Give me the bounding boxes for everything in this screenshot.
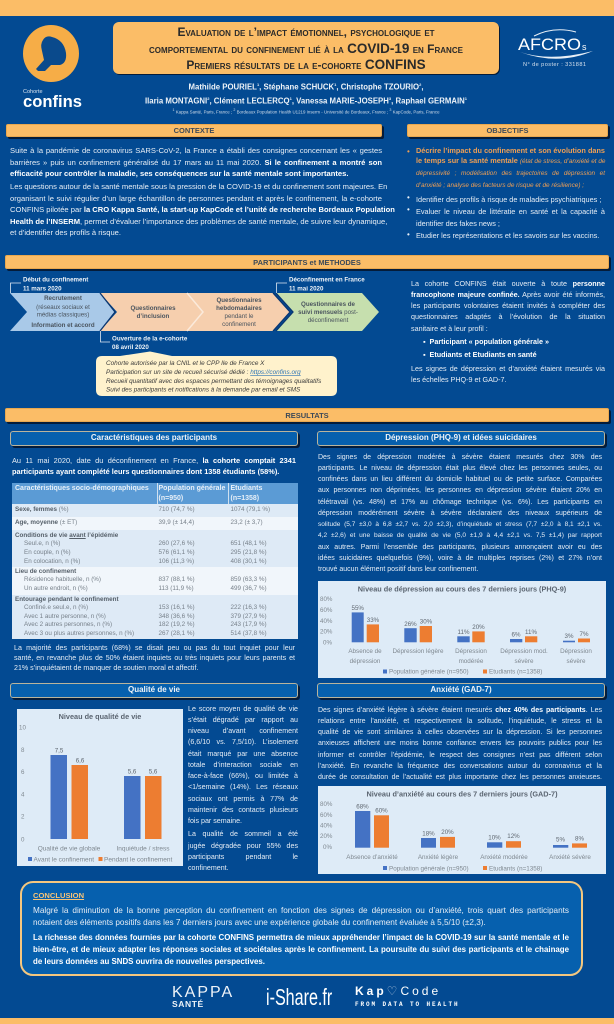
chart: niveau de qualité de vie: 4 xyxy=(21,792,25,798)
list: objectifs: dépressivité ; modélisation des trajectoires de dépression et xyxy=(416,170,605,177)
chevron: recrutement: médias classiques) xyxy=(37,312,89,318)
chart: niveau d'anxiété GAD-7: 60% xyxy=(320,812,333,819)
text: dépression: dépression modérément sévère à sévère déclaraient des niveaux supérieurs de xyxy=(318,510,602,517)
text: qualité de vie: totale d’interaction sociale en xyxy=(188,761,298,769)
timeline markers: 11 mars 2020 xyxy=(23,286,62,292)
text: inquiétudes: La majorité des participants (68%) se disait peu ou pas du tout inquiet pour leur xyxy=(14,644,295,652)
table header: Caractéristiques socio-démographiques xyxy=(15,485,149,492)
text: qualité de vie: Le score moyen de qualité de vie xyxy=(188,704,298,712)
chevron: recrutement xyxy=(10,293,115,331)
table rows: Entourage pendant le confinement xyxy=(15,596,119,603)
text: dépression: télétravail (vs. 48%) et 17% au chômage technique (vs. 6%). Les participants en xyxy=(318,498,602,506)
axis labels and legend: sévère xyxy=(515,658,534,665)
text: cohorte: participants ayant complété leurs questionnaires dont 1358 étudiants (58%). xyxy=(12,467,279,476)
heading: participants et methodes xyxy=(5,255,609,269)
heading: caractéristiques des participants: Caractéristiques des participants xyxy=(91,433,217,442)
text: anxiété: anxieuses affichent une moins bonne confiance envers les pouvoirs publics pour les xyxy=(318,740,602,747)
chart: niveau de dépression PHQ-9: 40% xyxy=(320,618,333,625)
text: population de l'étude: sanitaire et à leur profil : xyxy=(411,324,488,333)
heading: anxiété: Anxiété (GAD-7) xyxy=(430,685,492,694)
chart: niveau de qualité de vie: 8 xyxy=(21,747,25,754)
table rows: 23,2 (± 3,7) xyxy=(230,519,263,526)
table rows: 295 (21,8 %) xyxy=(230,549,267,556)
table rows: 379 (27,9 %) xyxy=(230,612,267,620)
table header: (n=950) xyxy=(158,495,183,502)
bars: 7,5 xyxy=(55,748,64,754)
text: population de l'étude xyxy=(411,278,605,384)
table rows: Lieu de confinement xyxy=(15,568,76,575)
bars: 5,6 xyxy=(128,768,137,776)
text: qualité de vie: niveau d’avant confinement xyxy=(188,727,298,735)
text: conclusion: La richesse des données fournies par la cohorte CONFINS permettra de mieux appréhender l’impact de la COVID-19 sur la santé mentale et le xyxy=(33,933,569,942)
text: population de l'étude: francophone majeure confinée. Après avoir été informés, xyxy=(411,290,605,299)
text: contexte: Les questions autour de la santé mentale sous la pression de la COVID-19 et du confinement sont majeures. En xyxy=(10,182,387,191)
text: conclusion: Malgré la diminution de la bonne perception du confinement en fonction des signes de dépression ou d’anxiété, trois quart des participants xyxy=(33,906,569,914)
table rows: 576 (61,1 %) xyxy=(158,549,195,556)
chevron: questionnaires: d’inclusion xyxy=(137,313,170,320)
table rows: 651 (48,1 %) xyxy=(230,540,267,547)
chart: niveau de dépression PHQ-9: 0% xyxy=(323,640,332,646)
bullets: • xyxy=(407,230,410,238)
bars xyxy=(355,804,587,848)
table rows: 348 (36,6 %) xyxy=(158,612,195,620)
chart: niveau d'anxiété GAD-7 xyxy=(318,786,606,874)
bars: 60% xyxy=(375,808,388,814)
bullets: • xyxy=(407,192,410,202)
table rows: 113 (11,9 %) xyxy=(158,585,194,592)
bars: 55% xyxy=(352,605,364,612)
heading: resultats: RESULTATS xyxy=(285,411,329,420)
bullets: • xyxy=(407,204,410,214)
chevron: recrutement: Recrutement xyxy=(44,295,82,302)
logo: AFCROs: AFCRO xyxy=(518,35,581,54)
logo: Kappa Santé: KAPPA xyxy=(172,984,234,1001)
text: conclusion xyxy=(33,906,569,966)
heading: qualité de vie xyxy=(10,683,298,698)
text: dépression: idées suicidaires quelquefois (9%), voire à de multiples reprises (2%) et 27% n’ont xyxy=(318,555,602,562)
text: dépression: solitude (5,7 ±3,0 à 6,8 ±2,7 vs. 2,0 ±2,3), d’inquiétude et stress (7,7 ±2,0 à 8,1 ±2,1 vs. xyxy=(318,521,602,528)
text: anxiété: informer et contrôler l’épidémie, le respect des consignes n’est pas différent selon xyxy=(318,752,602,759)
bars: 6% xyxy=(512,632,521,638)
axis labels and legend: Etudiants (n=1358) xyxy=(489,668,542,676)
axis labels and legend: Qualité de vie globale xyxy=(38,846,101,852)
text: contexte xyxy=(10,146,395,237)
bars: 12% xyxy=(507,833,520,840)
axis labels and legend: Pendant le confinement xyxy=(104,856,172,864)
chevron: suivi: suivi mensuels post- xyxy=(298,309,358,316)
table header: (n=1358) xyxy=(230,495,259,502)
timeline markers: 11 mai 2020 xyxy=(289,286,324,292)
table rows: Confiné.e seul.e, n (%) xyxy=(24,604,88,611)
chart: niveau de dépression PHQ-9: 80% xyxy=(320,596,333,603)
bars xyxy=(50,748,162,839)
chevron: suivi xyxy=(276,293,379,331)
text: anxiété: durée de consultation de l’actualité est plus importante chez les personnes anxieuses. xyxy=(318,774,602,781)
chart: niveau de qualité de vie xyxy=(17,709,183,866)
text: qualité de vie xyxy=(188,704,298,872)
table rows: Seul.e, n (%) xyxy=(24,540,60,547)
chart: niveau de qualité de vie: Niveau de qualité de vie xyxy=(59,712,141,721)
table rows: 260 (27,6 %) xyxy=(158,540,195,547)
text: inquiétudes: santé, en revanche plus de 50% étaient inquiets ou très inquiets pour leurs parents et xyxy=(14,654,295,662)
bars: 5% xyxy=(556,836,565,844)
logo: Kappa Santé xyxy=(172,984,234,1009)
table header: Etudiants xyxy=(230,485,262,492)
callout: protocole: Cohorte autorisée par la CNIL et le CPP Ile de France X xyxy=(106,360,265,367)
axis labels and legend: Anxiété modérée xyxy=(480,854,528,861)
list: objectifs: identifier des fakes news ; xyxy=(416,219,500,228)
chart: niveau de dépression PHQ-9: 20% xyxy=(320,628,333,636)
axis labels and legend: sévère xyxy=(567,658,586,665)
text: dépression: aux autres. Parmi l’ensemble des participants, plusieurs annonçaient avoir eu des xyxy=(318,544,602,550)
list: objectifs: le temps sur la santé mentale (état de stress, d’anxiété et de xyxy=(416,156,605,165)
text: anxiété: relations entre l’anxiété, et respectivement la solitude, l’inquiétude, le stress et la xyxy=(318,718,602,725)
logo: KapCode: Kap♡Code xyxy=(355,984,441,998)
chart: niveau de dépression PHQ-9 xyxy=(318,581,606,678)
list: objectifs: Identifier des profils à risque de maladies psychiatriques ; xyxy=(416,195,601,204)
callout: protocole: Suivi des participants et notifications à la demande par email et SMS xyxy=(106,386,301,394)
text: dépression: participants. Le niveau de dépression était plus élevé chez les personnes seules, ou xyxy=(318,465,602,472)
text: qualité de vie: sociaux ont permis à 77% de xyxy=(188,794,298,802)
text: cohorte xyxy=(12,456,296,476)
text: qualité de vie: La qualité de sommeil a été xyxy=(188,830,298,838)
chevron: questionnaires: pendant le xyxy=(225,313,254,320)
text: dépression xyxy=(318,454,602,573)
heading: contexte: CONTEXTE xyxy=(174,126,214,135)
table rows: 222 (16,3 %) xyxy=(230,604,267,611)
text: contexte: Health de l’INSERM, permet d’évaluer l’importance des problèmes de santé mentale, de suivre leur dynamique, xyxy=(10,217,387,226)
axis labels and legend: Dépression xyxy=(455,648,487,655)
text: anxiété: qualité de vie sont similaires à celles observées sur la dépression. Si les personnes xyxy=(318,729,602,736)
affiliations: 1 Kappa Santé, Paris, France ; 2 Bordeaux Population Health U1219 Inserm - Université de Bordeaux, France ; 3 KapCode, Paris, France xyxy=(172,108,440,114)
axis labels and legend: Population générale (n=950) xyxy=(389,668,469,676)
heading: participants et methodes: PARTICIPANTS et METHODES xyxy=(253,258,361,267)
bars: 3% xyxy=(565,633,574,640)
text: cohorte: Au 11 mai 2020, date du déconfinement en France, la cohorte comptait 2341 xyxy=(12,456,296,464)
list: objectifs: Décrire l’impact du confinement et son évolution dans xyxy=(416,146,605,154)
list: objectifs: d’anxiété ; analyse des facteurs de risque et de résilience) ; xyxy=(416,182,584,189)
callout: protocole: Participation sur un site de recueil sécurisé dédié : https://confins.org xyxy=(106,369,301,376)
text: population de l'étude: ▪ Participant « population générale » xyxy=(423,337,549,346)
table rows: Avec 1 autre personne, n (%) xyxy=(24,612,106,620)
bars: 20% xyxy=(441,829,454,836)
text: contexte: Suite à la pandémie de coronavirus SARS-CoV-2, la France a établi des consignes concernant les « gestes xyxy=(10,146,382,155)
table rows: 39,9 (± 14,4) xyxy=(158,519,194,526)
text: qualité de vie: <1/semaine (14%). Les réseaux xyxy=(188,783,298,791)
table rows: 106 (11,3 %) xyxy=(158,558,194,564)
chevron: suivi: Questionnaires de xyxy=(301,301,356,308)
text: dépression: Des signes de dépression modérée à sévère étaient mesurés chez 30% des xyxy=(318,454,602,460)
table rows: 153 (16,1 %) xyxy=(158,604,195,611)
text: qualité de vie: maintenir des contacts plusieurs xyxy=(188,806,298,814)
chart: niveau d'anxiété GAD-7: Niveau d’anxiété au cours des 7 derniers jours (GAD-7) xyxy=(366,790,558,798)
table rows: En colocation, n (%) xyxy=(24,558,80,564)
table rows: Sexe, femmes (%) xyxy=(15,506,69,513)
heading: qualité de vie: Qualité de vie xyxy=(128,685,180,694)
table rows: Age, moyenne (± ET) xyxy=(15,519,77,526)
heading: dépression xyxy=(317,431,605,446)
logo: i-Share.fr: i-Share.fr xyxy=(266,984,332,1010)
logo: cohorte confins xyxy=(23,25,82,110)
table rows: En couple, n (%) xyxy=(24,549,71,556)
table rows: Résidence habituelle, n (%) xyxy=(24,576,101,583)
bars: 30% xyxy=(420,618,433,626)
bars: 10% xyxy=(488,834,501,842)
heading: anxiété xyxy=(317,683,605,698)
text: qualité de vie: jugée dégradée pour 55% des xyxy=(188,842,298,850)
text: qualité de vie: fois par semaine. xyxy=(188,817,242,825)
list: objectifs xyxy=(407,146,606,240)
table rows: 267 (28,1 %) xyxy=(158,630,195,637)
text: inquiétudes xyxy=(14,644,295,672)
bars: 11% xyxy=(525,629,537,636)
flow diagram: timeline chevrons xyxy=(10,276,379,350)
table rows: 859 (63,3 %) xyxy=(230,576,267,583)
text: conclusion: bien-être, et de mieux adapter les réponses sociales et sociétales après le confinement. La poursuite du suivi des participants et le chainage xyxy=(33,945,569,954)
axis labels and legend: modérée xyxy=(459,658,484,665)
bars: 20% xyxy=(472,624,485,631)
text: population de l'étude: les participants volontaires étaient invités à compléter des xyxy=(411,301,605,310)
chevron: recrutement: (réseaux sociaux et xyxy=(36,304,90,311)
heading: contexte xyxy=(6,124,382,137)
text: population de l'étude: questionnaires adaptés à l’évolution de la situation xyxy=(411,312,605,321)
text: qualité de vie: était marqué par une absence xyxy=(188,750,298,758)
axis labels and legend: Dépression xyxy=(560,648,592,655)
heading: resultats xyxy=(5,408,609,422)
table header: Population générale xyxy=(158,485,225,492)
heading: conclusion: CONCLUSION xyxy=(33,891,84,900)
bars: 11% xyxy=(458,629,470,636)
text: contexte: barrières » puis un confinement généralisé du 17 mars au 11 mai 2020. Si le confinement a montré son xyxy=(10,158,382,167)
text: contexte: CONFINS pilotée par la CRO Kappa Santé, la start-up KapCode et l’unité de recherche Bordeaux Population xyxy=(10,205,395,214)
timeline markers: Début du confinement xyxy=(23,276,88,284)
authors: Ilaria MONTAGNI2, Clément LECLERCQ1, Vanessa MARIE-JOSEPH3, Raphael GERMAIN1 xyxy=(145,96,467,106)
chart: niveau d'anxiété GAD-7: 40% xyxy=(320,823,333,830)
bars: 26% xyxy=(404,621,417,628)
axis labels and legend: Anxiété légère xyxy=(418,854,459,861)
timeline markers: Ouverture de la e-cohorte xyxy=(112,336,188,342)
axis labels and legend: Inquiétude / stress xyxy=(116,846,170,852)
text: qualité de vie: s’était dégradé par rapport au xyxy=(188,716,298,724)
bars: 7% xyxy=(580,631,589,638)
text: anxiété: l’anxiété. En revanche la fréquence des conversations autour du coronavirus et la xyxy=(318,763,602,770)
text: anxiété: Des signes d’anxiété légère à sévère étaient mesurés chez 40% des participants. Les xyxy=(318,706,602,714)
axis labels and legend xyxy=(348,648,592,676)
logo: Kappa Santé: SANTÉ xyxy=(172,999,204,1009)
table rows: 1074 (79,1 %) xyxy=(230,506,270,513)
heading: caractéristiques des participants xyxy=(10,431,298,446)
text: dépression: confinées dans un lieu différent du domicile habituel ou de petite surface. Comparées xyxy=(318,476,602,483)
text: conclusion: de leurs données au SNDS ouvrira de nouvelles perspectives. xyxy=(33,957,265,966)
chart: niveau d'anxiété GAD-7: 20% xyxy=(320,833,333,840)
text: qualité de vie: confinement. xyxy=(188,864,229,872)
axis labels and legend xyxy=(28,846,172,864)
text: inquiétudes: 21% s’inquiétaient de manquer de soutien moral et affectif. xyxy=(14,664,198,672)
table rows xyxy=(15,506,270,637)
chart: niveau de qualité de vie: 2 xyxy=(21,814,25,820)
axis labels and legend: Dépression mod. xyxy=(500,648,548,655)
top band xyxy=(0,0,614,16)
title: Evaluation de l’impact émotionnel, psychologique et xyxy=(177,25,435,39)
chart: niveau de dépression PHQ-9: Niveau de dépression au cours des 7 derniers jours (PHQ-9) xyxy=(358,584,567,594)
bullets xyxy=(407,146,410,238)
axis labels and legend: Absence d’anxiété xyxy=(346,854,398,861)
logo: KapCode xyxy=(355,984,460,1008)
chart: niveau d'anxiété GAD-7: 80% xyxy=(320,801,333,808)
chevron: questionnaires xyxy=(100,293,290,331)
text: qualité de vie: participants pendant le xyxy=(188,853,298,861)
text: qualité de vie: face-à-face (66%), ou limitée à xyxy=(188,772,298,780)
text: population de l'étude: Les signes de dépression et d’anxiété étaient mesurés via xyxy=(411,364,605,373)
axis labels and legend: Etudiants (n=1358) xyxy=(489,866,542,872)
bottom band xyxy=(0,1018,614,1024)
authors: Mathilde POURIEL1, Stéphane SCHUCK1, Christophe TZOURIO2, xyxy=(188,82,424,92)
table rows: 837 (88,1 %) xyxy=(158,576,195,583)
text: conclusion: notaient des éléments positifs dans les 7 derniers jours avec une expérience globale du confinement évaluée à 5,5/10 (±2,3). xyxy=(33,918,486,926)
chevron: questionnaires: hebdomadaires xyxy=(216,305,262,312)
axis labels and legend: Absence de xyxy=(348,648,382,655)
chevron: questionnaires: Questionnaires xyxy=(216,297,262,304)
text: dépression: trouvé aucun élément positif dans leur confinement. xyxy=(318,566,478,573)
list: objectifs: Evaluer le niveau de littératie en santé et la capacité à xyxy=(416,207,605,216)
bars: 5,6 xyxy=(149,768,158,776)
bars: 68% xyxy=(356,804,369,810)
callout: protocole xyxy=(96,352,337,396)
table rows: 710 (74,7 %) xyxy=(158,506,195,513)
table rows: 182 (19,2 %) xyxy=(158,621,195,628)
timeline markers: Déconfinement en France xyxy=(289,276,365,284)
logo: AFCROs xyxy=(518,29,593,68)
table rows: Avec 3 ou plus autres personnes, n (%) xyxy=(24,630,134,637)
text: anxiété xyxy=(318,706,602,781)
text: population de l'étude: La cohorte CONFINS était ouverte à toute personne xyxy=(411,278,605,288)
bars: 18% xyxy=(422,830,435,838)
bullets: • xyxy=(407,146,410,156)
title: comportemental du confinement lié à la COVID-19 en France xyxy=(149,40,463,56)
text: contexte: et d’identifier des profils à risque. xyxy=(10,228,121,237)
logo: KapCode: FROM DATA TO HEALTH xyxy=(355,1001,460,1008)
text: qualité de vie: (6,6/10 vs. 7,5/10). L’isolement xyxy=(188,738,298,746)
authors xyxy=(145,82,467,106)
bars: 6,6 xyxy=(76,758,85,764)
text: contexte: organisant le suivi régulier d’un large échantillon de personnes pendant et après le confinement, la e-cohorte xyxy=(10,194,382,203)
chart: niveau de qualité de vie: 10 xyxy=(19,724,26,732)
logo: AFCROs: s xyxy=(582,42,587,52)
axis labels and legend: Anxiété sévère xyxy=(549,854,591,861)
table rows: 499 (36,7 %) xyxy=(230,585,267,592)
bars: 8% xyxy=(575,836,584,842)
chart: niveau d'anxiété GAD-7: 0% xyxy=(323,844,332,851)
table rows: 243 (17,9 %) xyxy=(230,621,267,628)
table: caractéristiques socio-démographiques xyxy=(12,483,298,639)
chart: niveau de qualité de vie: 0 xyxy=(21,836,25,844)
axis labels and legend: Avant le confinement xyxy=(34,856,94,864)
heading: dépression: Dépression (PHQ-9) et idées suicidaires xyxy=(385,433,537,442)
axis labels and legend: dépression xyxy=(350,658,381,665)
chevron: questionnaires: Questionnaires xyxy=(130,305,176,312)
axis labels and legend xyxy=(346,854,591,872)
table rows: 408 (30,1 %) xyxy=(230,558,267,564)
heading: objectifs: OBJECTIFS xyxy=(486,126,529,135)
panel: conclusion xyxy=(20,881,583,976)
heading: objectifs xyxy=(407,124,608,137)
axis labels and legend: Population générale (n=950) xyxy=(389,866,469,872)
table rows: 514 (37,8 %) xyxy=(230,630,267,637)
bars: 33% xyxy=(367,617,380,624)
table rows: Conditions de vie avant l’épidémie xyxy=(15,532,118,539)
logo: cohorte confins: Cohorte xyxy=(23,89,43,95)
bars xyxy=(352,605,590,642)
text: dépression: 4,2 ±2,6) et une baisse de qualité de vie (5,0 ±1,9 à 4,4 ±2,1 vs. 7,5 ±1,4) par rapport xyxy=(318,532,602,539)
title: Premiers résultats de la e-cohorte CONFINS xyxy=(186,57,426,72)
chevron: questionnaires: confinement xyxy=(222,321,256,328)
axis labels and legend: Dépression légère xyxy=(392,648,444,655)
logo: AFCROs: N° de poster : 331881 xyxy=(523,62,586,68)
text: dépression: aux personnes non déprimées, les personnes en dépression sévère étaient 20% en xyxy=(318,487,602,494)
text: contexte: efficacité pour contrôler la maladie, ses conséquences sur la santé mentale sont importantes. xyxy=(10,169,348,178)
title xyxy=(113,22,499,74)
text: population de l'étude: les échelles PHQ-9 et GAD-7. xyxy=(411,375,506,384)
chevron: suivi: déconfinement xyxy=(308,317,349,324)
table header xyxy=(15,484,262,502)
chart: niveau de dépression PHQ-9: 60% xyxy=(320,607,333,614)
list: objectifs: Etudier les représentations et les savoirs sur les vaccins. xyxy=(416,231,599,240)
text: population de l'étude: ▪ Etudiants et Etudiants en santé xyxy=(423,350,537,359)
chevron: recrutement: Information et accord xyxy=(31,322,95,329)
table rows: Un autre endroit, n (%) xyxy=(24,585,88,592)
table rows: Avec 2 autres personnes, n (%) xyxy=(24,621,112,628)
chart: niveau de qualité de vie: 6 xyxy=(21,769,25,776)
callout: protocole: Recueil quantitatif avec des espaces permettant des témoignages qualitatifs xyxy=(106,378,322,385)
timeline markers xyxy=(10,276,365,351)
